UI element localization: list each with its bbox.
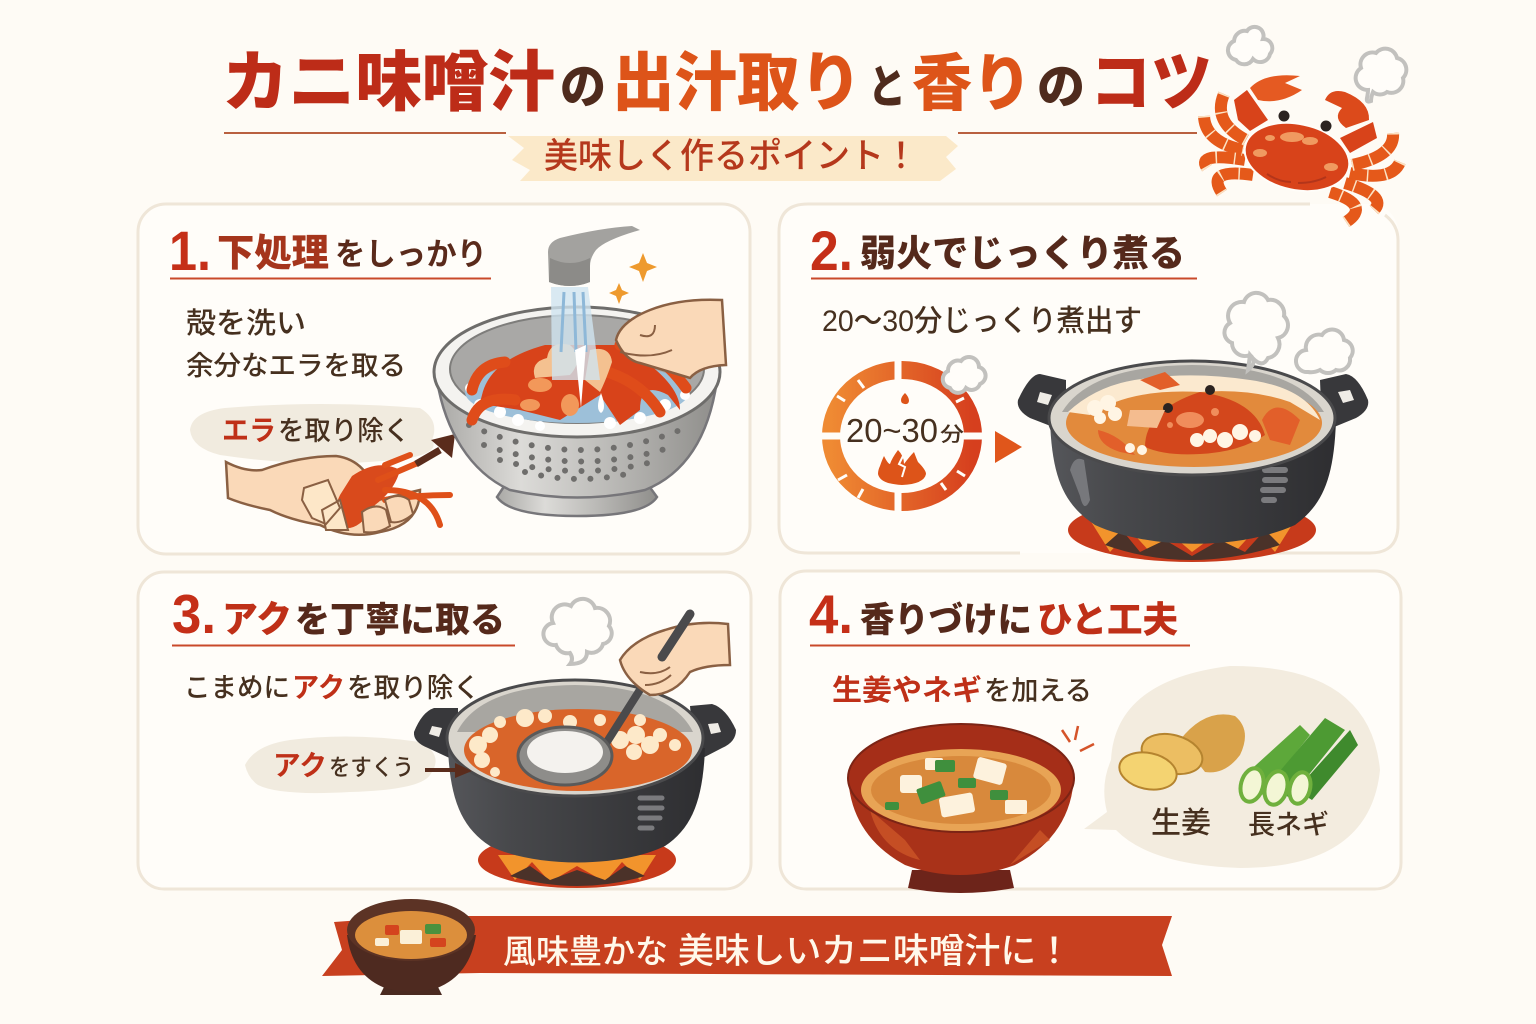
timer: 20 to 30 minutes: 20~30	[846, 412, 938, 449]
step 3 description: を取り除く	[347, 673, 480, 703]
step 2 heading	[810, 219, 1197, 282]
step 3 heading	[172, 583, 515, 646]
step 3 heading: アク	[222, 599, 292, 640]
title: の	[1037, 61, 1085, 114]
icon: steam clouds near crab	[1228, 27, 1406, 102]
icon: accent ticks	[1062, 726, 1094, 751]
banner	[322, 899, 1172, 995]
timer: 20 to 30 minutes	[820, 357, 986, 514]
icon: burner	[1068, 498, 1316, 562]
panel: step 4	[780, 571, 1401, 893]
timer: 20 to 30 minutes: 分	[940, 423, 964, 446]
title: と	[868, 61, 906, 113]
step 3 description: こまめに	[184, 673, 290, 703]
panel: step 3	[138, 572, 751, 889]
icon: crab	[1204, 75, 1400, 222]
step 1 heading: をしっかり	[335, 237, 487, 272]
step 1 description: 殻を洗い	[186, 307, 306, 340]
title: の	[560, 61, 606, 114]
icon: ladle and hand	[518, 614, 730, 785]
subtitle ribbon: 美味しく作るポイント！	[544, 137, 918, 176]
arrow to pot	[995, 431, 1022, 463]
arrow to pot	[425, 763, 472, 778]
icon: ginger	[1116, 714, 1245, 795]
banner: 美味しいカニ味噌汁に！	[678, 932, 1072, 971]
callout: skim scum: をすくう	[329, 754, 414, 780]
callout: skim scum: アク	[273, 750, 327, 781]
title: コツ	[1090, 47, 1212, 119]
step 3 description	[184, 672, 480, 703]
title: カニ味噌汁	[222, 45, 555, 119]
title: 出汁取り	[612, 47, 862, 119]
title: 香り	[912, 50, 1032, 119]
label: green onion: 長ネギ	[1248, 810, 1329, 840]
icon: colander with crab	[434, 287, 720, 516]
step 2 heading: 弱火でじっくり煮る	[860, 233, 1185, 274]
step 2 heading: 2.	[810, 219, 853, 282]
step 4 heading: ひと工夫	[1037, 599, 1178, 640]
step 1 description	[186, 307, 406, 381]
step 4 description: を加える	[984, 676, 1092, 706]
title	[222, 45, 1212, 119]
panel: step 1	[138, 204, 750, 554]
step 4 description: 生姜やネギ	[832, 674, 982, 707]
step 3 heading: 3.	[172, 583, 216, 645]
speech bubble: ginger and leek	[1084, 666, 1380, 868]
panel: step 2	[779, 204, 1398, 562]
icon: pot with scum	[414, 680, 736, 862]
title rule	[224, 132, 1197, 134]
step 3 heading: を丁寧に取る	[295, 601, 505, 640]
callout: remove gills: を取り除く	[278, 416, 410, 446]
icon: faucet	[548, 226, 640, 286]
step 4 heading	[809, 583, 1190, 646]
icon: hand in colander	[616, 300, 726, 378]
icon: sparkles	[609, 253, 657, 304]
label: ginger: 生姜	[1151, 807, 1211, 840]
callout: remove gills: エラ	[222, 415, 276, 446]
icon: pot with crab soup	[1018, 361, 1368, 544]
icon: green onion	[1237, 718, 1358, 807]
step 3 description: アク	[292, 672, 345, 703]
banner: 風味豊かな	[503, 933, 668, 970]
icon: hand holding crab	[226, 455, 450, 535]
step 4 heading: 4.	[809, 583, 853, 645]
arrow to colander	[416, 434, 455, 464]
step 1 heading	[169, 219, 491, 282]
icon: miso soup bowl	[848, 724, 1074, 893]
icon: steam	[543, 599, 612, 664]
callout: skim scum	[245, 736, 436, 793]
step 2 description: 20～30分じっくり煮出す	[822, 305, 1142, 338]
icon: pot steam	[1224, 293, 1353, 373]
step 1 description: 余分なエラを取る	[186, 351, 406, 381]
step 1 heading: 1.	[169, 219, 211, 282]
icon: burner	[478, 832, 676, 888]
step 4 heading: 香りづけに	[860, 601, 1032, 640]
callout: remove gills	[190, 404, 434, 463]
icon: soup bowl	[347, 899, 476, 995]
step 1 heading: 下処理	[217, 233, 329, 275]
step 4 description	[832, 674, 1092, 707]
